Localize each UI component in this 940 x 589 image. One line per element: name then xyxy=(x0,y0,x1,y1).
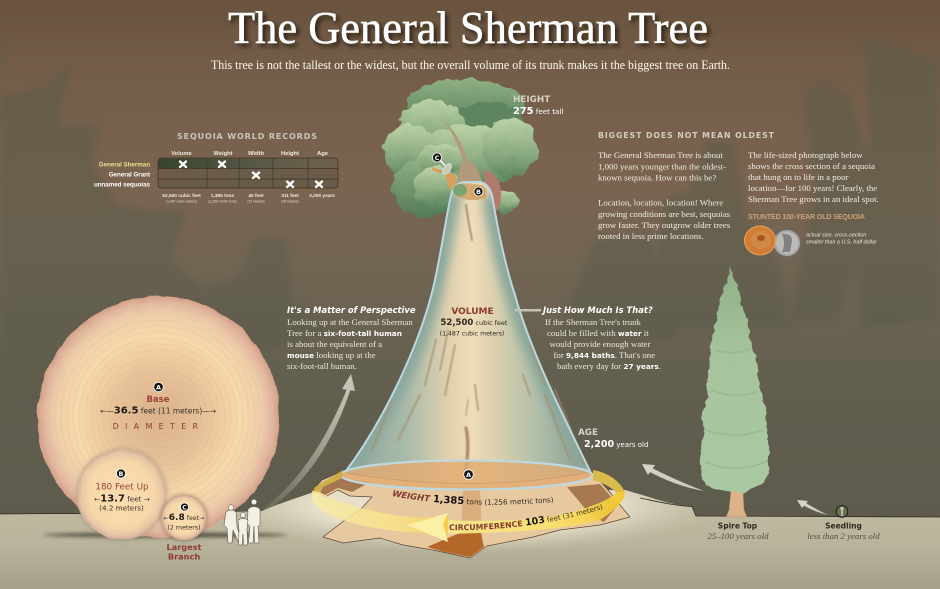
text block: location: growing conditions are best, sequoias xyxy=(598,209,731,219)
marker: B crown xyxy=(469,185,487,199)
records table: Width xyxy=(248,151,264,157)
icon: half dollar coin xyxy=(774,230,800,256)
label: height: 275 feet tall xyxy=(513,106,563,117)
text block: life-sized photograph: Sherman Tree grows in an ideal spot. xyxy=(748,194,879,204)
icon: stunted cross section xyxy=(744,226,776,255)
marker: B crown: B xyxy=(476,188,481,196)
label: height: HEIGHT xyxy=(513,95,550,105)
text block: how much is that: could be filled with xyxy=(547,328,618,338)
title: The General Sherman Tree xyxy=(228,2,708,53)
text block: life-sized photograph: location—for 100 years! Clearly, the xyxy=(748,183,877,193)
illustration: general sherman tree crown xyxy=(383,79,537,217)
ellipse: base of trunk xyxy=(340,460,592,490)
caption: actual size: actual size, cross-section xyxy=(806,232,866,238)
subtitle: This tree is not the tallest or the widest, but the overall volume of its trunk makes it the biggest tree on Earth. xyxy=(211,57,730,72)
marker C: C xyxy=(182,504,187,511)
text block: perspective: looking up at the xyxy=(314,350,376,360)
bark streaks xyxy=(372,205,585,475)
records table: 3,200 years xyxy=(309,193,335,199)
label: base diameter value: ←—36.5 feet (11 meters)—→ xyxy=(100,406,216,416)
text block: how much is that: bath every day for xyxy=(557,361,623,371)
text block: how much is that: 9,844 baths. That's one xyxy=(566,350,655,360)
ground xyxy=(0,490,940,589)
text block: perspective xyxy=(287,305,416,371)
text block: how much is that: water it xyxy=(618,328,649,338)
cross section: largest branch xyxy=(162,496,206,540)
label: seedling xyxy=(807,522,880,541)
heading: biggest does not mean oldest: BIGGEST DOES NOT MEAN OLDEST xyxy=(598,131,775,140)
label: 6.8 feet: ←6.8 feet→ xyxy=(164,513,204,523)
label: weight: WEIGHT 1,385 tons (1,256 metric tons) xyxy=(393,490,553,506)
text block: perspective: Looking up at the General Sherman xyxy=(287,317,413,327)
trunk outline xyxy=(343,182,592,475)
text block: how much is that xyxy=(541,305,661,371)
label: height xyxy=(513,95,563,117)
illustration: spire top sequoia xyxy=(700,267,769,517)
icon: seedling xyxy=(836,506,848,517)
records table: (1,256 metric tons) xyxy=(208,200,237,204)
label: largest branch: Branch xyxy=(168,552,200,562)
label: circumference: CIRCUMFERENCE 103 feet (31 meters) xyxy=(449,504,602,530)
records table: (95 meters) xyxy=(281,200,299,204)
text block: location: rooted in less prime locations. xyxy=(598,231,704,241)
text block: younger than the oldest: The General Sherman Tree is about xyxy=(598,150,723,160)
label: 180 feet up: 180 Feet Up xyxy=(95,482,149,492)
records table: General Grant xyxy=(109,172,150,178)
text block: younger than the oldest: 1,000 years younger than the oldest- xyxy=(598,162,726,172)
top of trunk branches xyxy=(456,183,486,200)
cross section: base diameter xyxy=(38,296,280,538)
records table xyxy=(94,151,338,204)
label: age: AGE xyxy=(578,428,598,438)
text block: location: grow faster. They outgrow older trees xyxy=(598,220,731,230)
text block: life-sized photograph: The life-sized photograph below xyxy=(748,150,863,160)
label: base: Base xyxy=(146,395,170,405)
label: diameter: DIAMETER xyxy=(113,422,204,431)
label: seedling: Seedling xyxy=(825,522,862,530)
label: largest branch: Largest xyxy=(167,542,202,552)
tree roots xyxy=(313,472,630,558)
records table: (12 meters) xyxy=(247,200,265,204)
caption: actual size: smaller than a U.S. half dollar xyxy=(806,240,877,246)
arrow: circumference band xyxy=(312,470,625,542)
label: spire top: Spire Top xyxy=(718,522,758,530)
text block: perspective: six-foot-tall human. xyxy=(287,361,357,371)
marker: C crown xyxy=(432,153,453,176)
icon: human family for scale xyxy=(224,499,260,545)
text block: how much is that: Just How Much Is That? xyxy=(541,305,653,315)
callout line xyxy=(515,309,541,312)
label: spire top xyxy=(707,522,769,541)
background tree silhouettes xyxy=(0,35,940,420)
label: volume xyxy=(440,307,508,338)
spire trunk xyxy=(726,490,747,517)
panel: sequoia world records xyxy=(94,132,338,204)
marker: C crown: C xyxy=(435,154,440,162)
records table: (1,487 cubic meters) xyxy=(166,200,197,204)
label: volume: (1,487 cubic meters) xyxy=(440,330,504,338)
label: age: 2,200 years old xyxy=(584,439,648,450)
records table: Weight xyxy=(213,151,233,157)
tree rings xyxy=(55,314,261,520)
label: age xyxy=(578,428,648,450)
spire foliage xyxy=(700,267,769,492)
label: 4.2 meters: (4.2 meters) xyxy=(99,504,144,512)
marker: A trunk: A xyxy=(466,471,471,479)
trunk edge shading xyxy=(343,192,592,475)
label: stunted sequoia: STUNTED 100-YEAR OLD SEQUOIA xyxy=(748,212,865,221)
text block: life-sized photograph: that hung on to life in a poor xyxy=(748,172,848,182)
arrow: spire to age xyxy=(642,464,704,491)
records table: Height xyxy=(281,151,299,157)
marker B: B xyxy=(119,470,124,478)
text block: how much is that: 27 years. xyxy=(623,361,661,371)
text block: how much is that: would provide enough water xyxy=(550,339,650,349)
marker A: A xyxy=(156,384,161,392)
text block: how much is that: for xyxy=(554,350,566,360)
records table: Volume xyxy=(171,151,193,157)
label: volume: 52,500 cubic feet xyxy=(441,318,508,328)
text block: how much is that: If the Sherman Tree's trunk xyxy=(545,317,641,327)
records table: unnamed sequoias xyxy=(94,182,151,188)
records table: 52,500 cubic feet xyxy=(162,193,201,199)
records table: General Sherman xyxy=(99,162,150,168)
trunk volume cone xyxy=(343,182,592,488)
marker: A trunk xyxy=(464,470,473,479)
arrow: perspective xyxy=(262,374,355,510)
spire shading xyxy=(706,349,765,468)
text block: perspective: It's a Matter of Perspective xyxy=(287,305,416,315)
marker A xyxy=(154,382,163,392)
records table: 311 feet xyxy=(281,193,299,199)
arrow: seedling to spire xyxy=(797,500,828,515)
text block: life-sized photograph: shows the cross section of a sequoia xyxy=(748,161,875,171)
text block: perspective: Tree for a xyxy=(287,328,324,338)
foliage xyxy=(383,79,537,217)
text block: location: Location, location, location! Where xyxy=(598,198,723,208)
records table: Age xyxy=(317,151,329,157)
ground shadow under cross sections and people xyxy=(43,532,287,538)
text block: younger than the oldest: known sequoia. How can this be? xyxy=(598,172,716,182)
records table: 1,385 tons xyxy=(211,193,235,199)
label: volume: VOLUME xyxy=(451,307,494,317)
cross section: 180 feet up xyxy=(76,449,166,539)
label: seedling: less than 2 years old xyxy=(807,531,880,541)
panel: biggest does not mean oldest xyxy=(598,131,879,256)
branches xyxy=(432,120,501,215)
heading: sequoia world records: SEQUOIA WORLD RECORDS xyxy=(177,132,317,141)
text block: perspective: six-foot-tall human xyxy=(324,329,402,338)
label: spire top: 25–100 years old xyxy=(707,531,769,541)
text block: perspective: mouse xyxy=(287,351,314,360)
label: 2 meters: (2 meters) xyxy=(167,524,201,532)
text block: perspective: is about the equivalent of a xyxy=(287,339,382,349)
label: 13.7 feet: ←13.7 feet → xyxy=(94,494,150,504)
records table: 40 feet xyxy=(248,193,264,199)
